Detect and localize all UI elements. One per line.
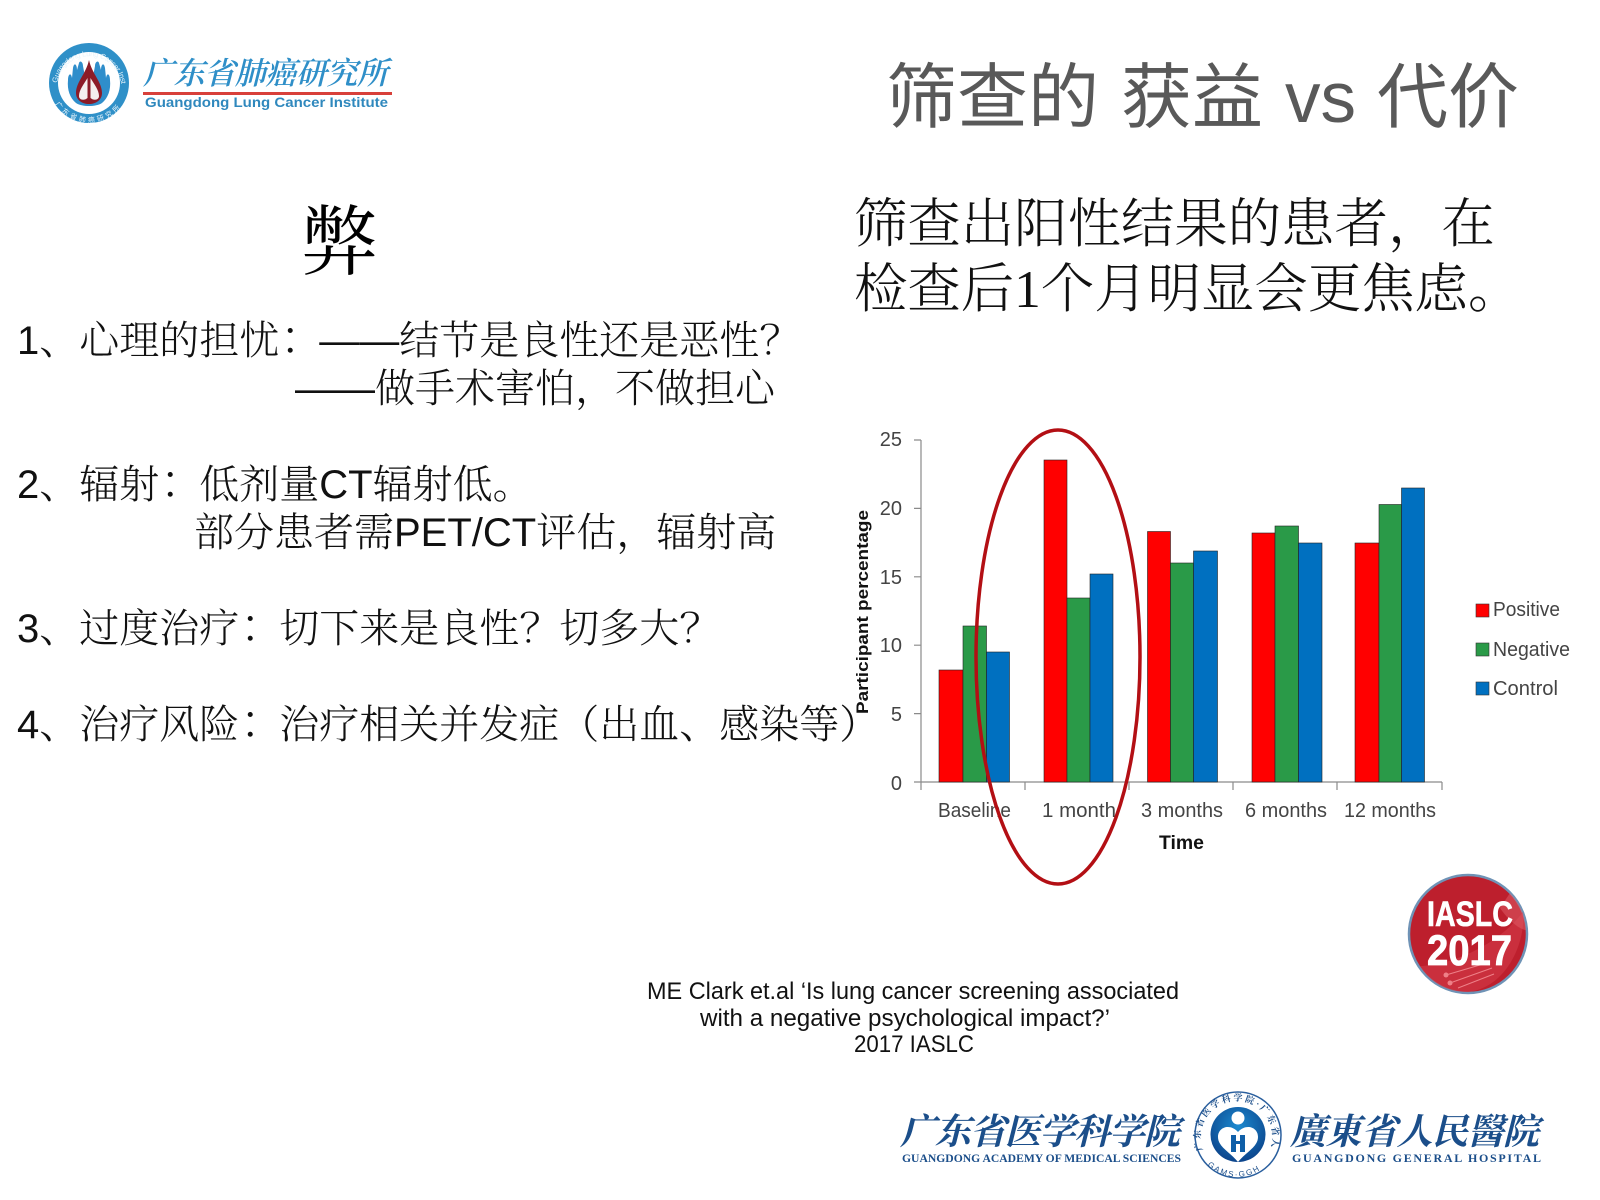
title: 代价 bbox=[1377, 59, 1519, 138]
y tick labels: 10 bbox=[880, 635, 902, 657]
y tick labels: 25 bbox=[880, 429, 902, 451]
badge: IASLC 2017: 2017 bbox=[1427, 927, 1512, 975]
x category labels bbox=[938, 800, 1436, 822]
title: vs bbox=[1285, 59, 1356, 138]
list item 3: overtreatment: 3、过度治疗：切下来是良性？切多大？ bbox=[17, 597, 710, 654]
citation: 2017 IASLC bbox=[854, 1031, 974, 1058]
chart axes bbox=[914, 440, 1442, 790]
bars: 12 months bbox=[1355, 488, 1424, 782]
bars: baseline bbox=[939, 626, 1010, 782]
list item 2: radiation: 部分患者需PET/CT评估，辐射高 bbox=[194, 501, 776, 558]
citation bbox=[647, 978, 1179, 1058]
icon: institute seal: 广东省肺癌研究所 bbox=[55, 102, 120, 123]
x category labels: 1 month bbox=[1042, 800, 1116, 822]
logo: hospital Chinese name: 廣東省人民醫院 bbox=[1290, 1104, 1545, 1155]
x axis title: Time bbox=[1159, 833, 1204, 854]
citation: with a negative psychological impact?’ bbox=[699, 1005, 1110, 1032]
logo: Guangdong Lung Cancer Institute bbox=[49, 43, 393, 123]
x category labels: 3 months bbox=[1141, 800, 1223, 822]
logo: institute English name: Guangdong Lung Cancer Institute bbox=[145, 95, 389, 110]
logo: hospital English name: GUANGDONG GENERAL HOSPITAL bbox=[1292, 1151, 1541, 1165]
list item 1: psychological worry: 1、心理的担忧：——结节是良性还是恶性？ bbox=[17, 309, 790, 366]
icon: joint seal: 广东省医学科学院·广东省人民医院 bbox=[1192, 1093, 1280, 1151]
logo: academy English name: GUANGDONG ACADEMY OF MEDICAL SCIENCES bbox=[902, 1151, 1181, 1165]
x category labels: 12 months bbox=[1344, 800, 1436, 822]
legend: Control bbox=[1493, 678, 1558, 700]
citation: ME Clark et.al ‘Is lung cancer screening associated bbox=[647, 978, 1179, 1005]
y tick labels: 15 bbox=[880, 567, 902, 589]
heading: drawbacks: 弊 bbox=[301, 181, 378, 292]
list item 1: psychological worry: ——做手术害怕，不做担心 bbox=[295, 357, 775, 414]
legend: Positive bbox=[1493, 599, 1560, 621]
bars: 1 month bbox=[1044, 460, 1113, 782]
title: 获益 bbox=[1121, 59, 1263, 138]
bar chart: anxiety by time bbox=[853, 429, 1570, 884]
legend bbox=[1476, 599, 1570, 700]
list: drawbacks of screening bbox=[17, 309, 879, 750]
badge: IASLC 2017: IASLC bbox=[1427, 895, 1513, 934]
y tick labels: 5 bbox=[891, 704, 902, 726]
list item 4: treatment risk: 4、治疗风险：治疗相关并发症（出血、感染等） bbox=[17, 693, 879, 750]
y axis title: Participant percentage bbox=[853, 510, 872, 714]
bars: 6 months bbox=[1252, 526, 1322, 782]
icon: joint seal: GAMS·GGH bbox=[1208, 1162, 1259, 1177]
list item 2: radiation: 2、辐射：低剂量CT辐射低。 bbox=[17, 453, 533, 510]
y tick labels bbox=[880, 429, 902, 795]
icon: joint seal bbox=[1192, 1091, 1282, 1179]
icon: institute seal bbox=[49, 43, 129, 123]
y tick labels: 0 bbox=[891, 773, 902, 795]
legend: Negative bbox=[1493, 639, 1570, 661]
logo: academy Chinese name: 广东省医学科学院 bbox=[900, 1104, 1186, 1155]
callout: ellipse around 1 month bbox=[976, 430, 1140, 884]
badge: IASLC 2017 bbox=[1409, 875, 1527, 993]
logo: institute Chinese name: 广东省肺癌研究所 bbox=[143, 48, 393, 93]
text block: anxiety finding: 检查后1个月明显会更焦虑。 bbox=[854, 259, 1521, 319]
text block: anxiety finding: 筛查出阳性结果的患者，在 bbox=[854, 182, 1495, 258]
y tick labels: 20 bbox=[880, 498, 902, 520]
x category labels: Baseline bbox=[938, 800, 1011, 822]
x category labels: 6 months bbox=[1245, 800, 1327, 822]
bars: 3 months bbox=[1148, 532, 1218, 782]
title: 筛查的 bbox=[886, 59, 1099, 138]
